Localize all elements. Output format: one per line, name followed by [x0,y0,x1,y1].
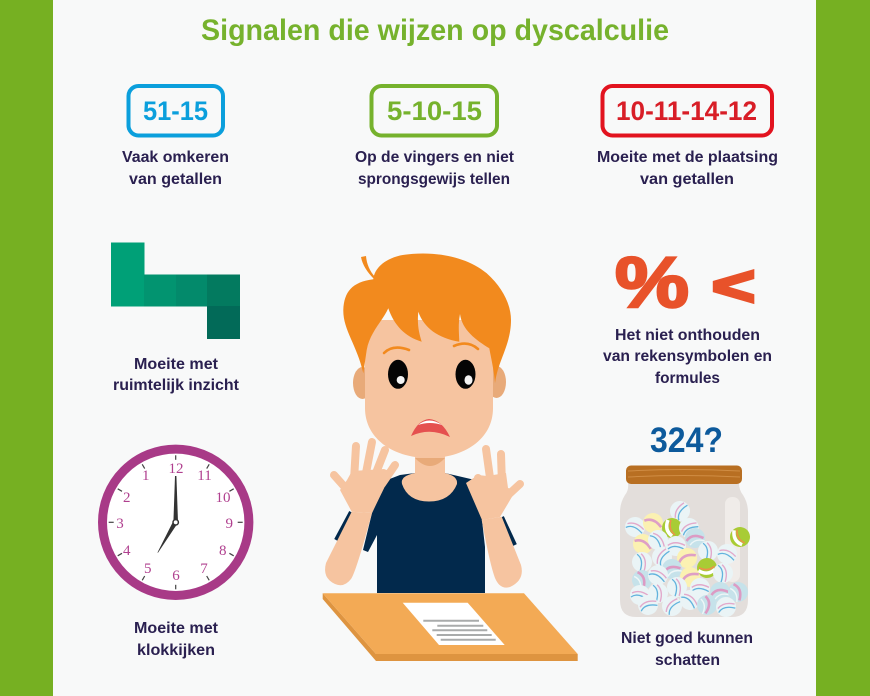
back sleeves [336,512,515,545]
icon: mirrored clock: 8 [219,543,226,559]
icon: mirrored clock: 3 [116,516,124,532]
caption: Moeite met [134,356,219,373]
caption [134,620,219,659]
caption: ruimtelijk inzicht [113,377,240,394]
caption: Moeite met [134,620,219,637]
icon: mirrored clock: 2 [123,490,130,506]
ears [353,366,506,399]
icon: mirrored clock: 9 [226,516,233,532]
hair [343,254,511,383]
caption: van getallen [640,171,734,188]
mouth [411,419,450,437]
number box 10-11-14-12 [602,86,772,136]
icon: mirrored clock: 11 [197,468,212,484]
title: Signalen die wijzen op dyscalculie [201,14,669,47]
eyes [388,360,476,389]
icon: percent sign: % [615,244,689,323]
caption [621,630,753,669]
left arm and hand [325,442,395,585]
hair tuft [361,256,375,279]
right arm and hand [466,449,522,588]
panel: estimating [620,421,753,669]
caption: Het niet onthouden [615,327,760,344]
icon: mirrored clock: 6 [172,568,180,584]
number 324?: 324? [650,421,723,460]
caption: Moeite met de plaatsing [597,149,778,166]
head [343,254,511,458]
caption [597,149,778,188]
icon: less-than sign: < [712,254,755,317]
illustration: worried boy at desk [323,254,578,661]
number box 5-10-15: 5-10-15 [387,96,482,126]
panel: finger counting [355,86,515,188]
caption [603,327,772,387]
caption: van getallen [129,171,222,188]
caption [122,149,229,188]
panel: spatial insight [111,242,240,394]
icon: mirrored clock: 4 [123,543,131,559]
panel: reversing numbers [122,86,229,188]
caption: schatten [655,652,720,669]
caption [355,149,515,188]
caption: Vaak omkeren [122,149,229,166]
worksheet [403,603,505,645]
number box 51-15: 51-15 [143,96,208,126]
icon: mirrored clock: 10 [216,490,230,506]
caption: formules [655,370,720,387]
panel: symbols [603,244,772,387]
icon: mirrored clock [102,449,249,596]
icon: mirrored clock: 7 [200,561,208,577]
number box 10-11-14-12: 10-11-14-12 [616,96,757,126]
neck and collar skin [402,450,457,502]
shirt [363,473,485,593]
desk [323,593,578,661]
panel: clock reading [102,449,249,659]
icon: green blocks [111,242,240,339]
icon: mirrored clock: 1 [142,468,149,484]
icon: mirrored clock: 5 [144,561,151,577]
eyebrows [384,344,478,353]
caption: van rekensymbolen en [603,348,772,365]
caption: klokkijken [137,642,215,659]
icon: jar of marbles [620,466,752,620]
panel: number placement [597,86,778,188]
caption: Niet goed kunnen [621,630,753,647]
caption [113,356,240,394]
face [365,320,493,458]
icon: mirrored clock: 12 [168,461,184,477]
caption: Op de vingers en niet [355,149,515,166]
number box 5-10-15 [372,86,497,136]
caption: sprongsgewijs tellen [358,171,510,188]
